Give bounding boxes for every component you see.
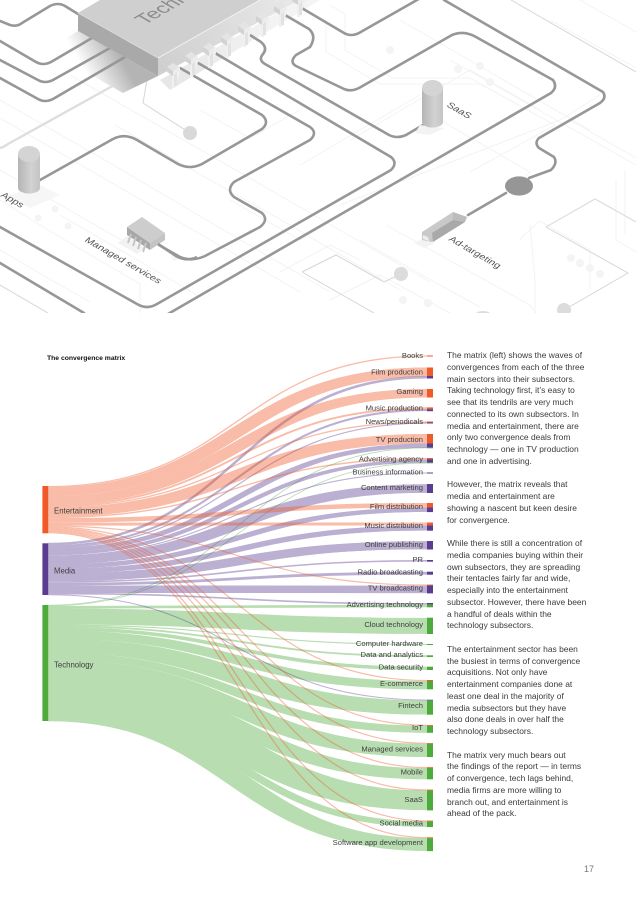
target bars: green [427,448,433,851]
target labels: Business information [352,467,423,476]
target labels: News/periodicals [366,417,423,426]
target labels: E-commerce [380,679,423,688]
icon: ad-targeting connector [414,212,467,248]
source labels: Media [54,567,76,576]
target labels: Cloud technology [364,620,423,629]
target labels: Music production [366,403,423,412]
circuit traces [0,0,604,314]
target labels: TV broadcasting [368,583,423,592]
page number: 17 [584,864,594,874]
label: Ad-targeting: Ad-targeting [446,235,503,271]
target labels: Online publishing [365,540,423,549]
target bars: purple [427,376,433,700]
target labels: Film production [371,367,423,376]
icon: large chip "Tech" [78,0,305,88]
target labels: Advertising technology [347,600,423,609]
target labels: Mobile [401,767,423,776]
source labels: Technology [54,661,94,670]
target labels: Data security [379,662,423,671]
flows from technology [48,448,427,844]
flows from media [48,377,427,700]
target labels: SaaS [404,795,423,804]
target labels: Gaming [396,387,423,396]
target labels: Radio broadcasting [358,567,423,576]
target labels: Music distribution [364,521,423,530]
target labels: Data and analytics [361,650,423,659]
flows from entertainment [48,356,427,838]
target labels: Content marketing [361,483,423,492]
icon: SaaS cylinder [415,80,445,135]
target bars: orange [427,356,433,838]
target labels: PR [412,555,424,564]
light trace [0,68,145,148]
target labels: IoT [412,723,423,732]
source bars [42,486,48,721]
target labels: Social media [380,818,424,827]
target labels: Books [402,351,423,360]
target labels: Film distribution [370,502,423,511]
target labels: Software app development [333,838,424,847]
target labels: TV production [376,435,423,444]
target labels: Fintech [398,701,423,710]
target labels: Computer hardware [356,639,423,648]
illustration: circuit board [0,0,636,313]
icon: ad-targeting node [505,176,533,196]
label: Managed services: Managed services [82,236,164,286]
icon: small chip Managed services [118,217,197,259]
target labels: Managed services [361,744,423,753]
outlined light traces [0,0,636,321]
source labels [54,507,103,670]
icon: Apps cylinder [5,146,60,208]
target labels: Advertising agency [359,454,423,463]
target labels [333,351,424,847]
text block: commentary: The matrix (left) shows the waves of convergences from each of the three main sectors into their subsectors. Taking technology first, it’s easy to see that its tendrils are very much connected to its own subsectors. In media and entertainment, there are only two convergence deals from technology — one in TV production and one in advertising. However, the matrix reveals that media and entertainment are showing a nascent but keen desire for convergence. While there is still a concentration of media companies buying within their own subsectors, they are spreading their tentacles fairly far and wide, especially into the entertainment subsector. However, there have been a handful of deals within the technology subsectors. The entertainment sector has been the busiest in terms of convergence acquisitions. Not only have entertainment companies done at least one deal in the majority of media subsectors but they have also done deals in over half the technology subsectors. The matrix very much bears out the findings of the report — in terms of convergence, tech lags behind, media firms are more willing to branch out, and entertainment is ahead of the pack. [447,350,586,818]
heading: chart title: The convergence matrix [47,355,125,362]
faint background traces [0,0,636,313]
source labels: Entertainment [54,507,103,516]
label: SaaS: SaaS [444,101,474,121]
chip shadows [47,0,320,93]
